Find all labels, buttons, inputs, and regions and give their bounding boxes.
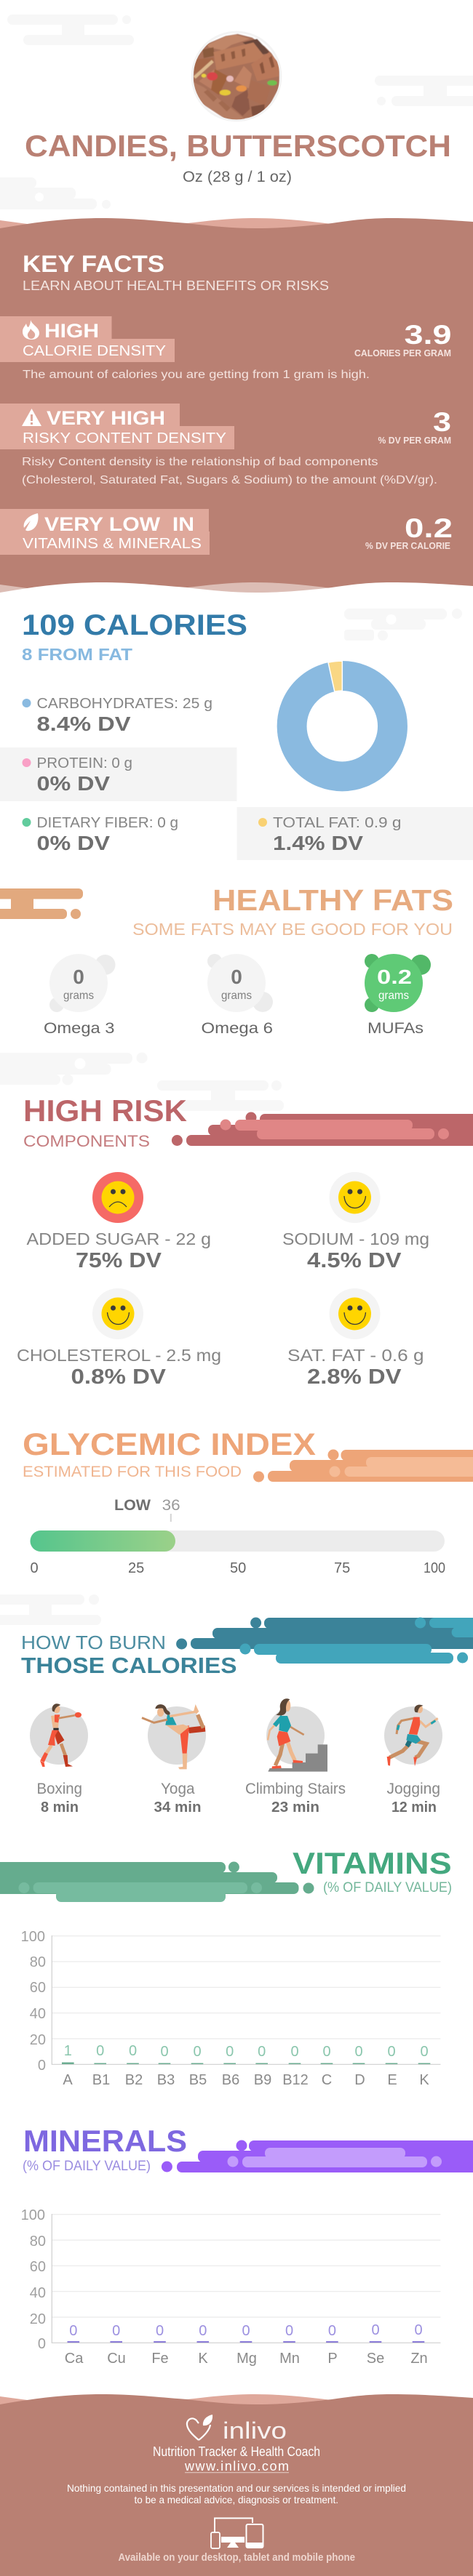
- activity: climbing stairs: 23 min: [271, 1799, 319, 1815]
- vitamins heading: VITAMINS: [293, 1846, 452, 1880]
- legend: carbohydrates: 8.4% DV: [36, 713, 131, 735]
- legend: protein: [22, 755, 132, 795]
- risk: cholesterol: CHOLESTEROL - 2.5 mg: [17, 1346, 221, 1365]
- glycemic subheading: ESTIMATED FOR THIS FOOD: [23, 1464, 242, 1480]
- panel: how to burn those calories: [21, 1617, 473, 1815]
- legend: protein: 0% DV: [36, 772, 110, 795]
- activity: yoga: 34 min: [154, 1799, 201, 1815]
- minerals bar chart: 0: [414, 2322, 423, 2338]
- fact: calorie density: CALORIES PER GRAM: [354, 348, 451, 358]
- minerals subheading: (% OF DAILY VALUE): [23, 2159, 151, 2174]
- vitamins bar chart: 40: [30, 2006, 46, 2022]
- vitamins bar chart: B1: [92, 2072, 110, 2088]
- glycemic gauge: 100: [424, 1560, 445, 1576]
- activity: climbing stairs: Climbing Stairs: [245, 1781, 346, 1797]
- fact: risky content density: RISKY CONTENT DENSITY: [23, 430, 226, 446]
- vitamins bar chart: 0: [354, 2044, 363, 2060]
- glycemic band: [253, 1450, 473, 1482]
- vitamins bar chart: 1: [64, 2043, 72, 2059]
- high risk subheading: COMPONENTS: [23, 1132, 150, 1150]
- minerals bar chart: 0: [371, 2322, 380, 2338]
- fact: calorie density: [0, 316, 451, 381]
- vitamins bar chart: B2: [125, 2072, 143, 2088]
- activity: yoga: Yoga: [161, 1781, 195, 1797]
- minerals bar chart: 0: [69, 2323, 77, 2339]
- brand name: inlivo: [223, 2417, 287, 2444]
- fact: calorie density: The amount of calories you are getting from 1 gram is high.: [23, 369, 370, 381]
- minerals bar chart: 60: [30, 2259, 46, 2275]
- food photo: chocolate candies: [189, 29, 284, 124]
- omega 6 badge: 0: [231, 966, 242, 988]
- panel: high risk components: [17, 1094, 473, 1389]
- vitamins bar chart: A: [63, 2072, 73, 2088]
- vitamins bar chart: 20: [30, 2032, 46, 2048]
- legend: total fat: TOTAL FAT: 0.9 g: [273, 815, 402, 831]
- vitamins bar chart: 0: [387, 2044, 396, 2060]
- risk: added sugar: [26, 1172, 211, 1272]
- risk: sodium: [282, 1172, 429, 1272]
- minerals bar chart: Cu: [107, 2351, 126, 2367]
- minerals bar chart: 0: [156, 2323, 164, 2339]
- glycemic gauge: [31, 1497, 445, 1576]
- mufas badge: MUFAs: [367, 1020, 424, 1037]
- minerals bar chart: Fe: [151, 2351, 169, 2367]
- omega 3 badge: grams: [63, 990, 94, 1002]
- minerals bar chart: 0: [199, 2323, 207, 2339]
- glycemic gauge: 0: [31, 1560, 39, 1576]
- omega 6 badge: [201, 954, 273, 1037]
- icon: leaf: [24, 513, 38, 531]
- glycemic gauge: 50: [230, 1560, 246, 1576]
- glycemic gauge: 25: [128, 1560, 144, 1576]
- disclaimer: Nothing contained in this presentation and our services is intended or implied: [67, 2482, 406, 2494]
- legend: carbohydrates: CARBOHYDRATES: 25 g: [36, 696, 212, 712]
- glycemic gauge: 75: [334, 1560, 350, 1576]
- minerals bar chart: 20: [30, 2311, 46, 2327]
- vitamins bar chart: E: [387, 2072, 397, 2088]
- minerals bar chart: 100: [21, 2207, 45, 2223]
- legend: dietary fiber: [22, 815, 178, 854]
- vitamins bar chart: [21, 1929, 440, 2088]
- vitamins bar chart: 0: [193, 2044, 202, 2060]
- omega 6 badge: grams: [221, 990, 252, 1002]
- vitamins bar chart: B3: [157, 2072, 175, 2088]
- fact: risky content density: VERY HIGH: [47, 407, 165, 429]
- vitamins bar chart: 0: [38, 2058, 46, 2074]
- fact: risky content density: Risky Content density is the relationship of bad components: [22, 456, 378, 468]
- donut chart: [292, 661, 393, 777]
- risk: cholesterol: [17, 1288, 221, 1389]
- burn band: [176, 1617, 473, 1664]
- omega 3 badge: [44, 954, 115, 1037]
- legend: carbohydrates: [22, 696, 212, 735]
- vitamins band: [0, 1861, 314, 1902]
- activity: jogging: Jogging: [387, 1781, 440, 1797]
- healthy fats subheading: SOME FATS MAY BE GOOD FOR YOU: [132, 920, 453, 939]
- glycemic gauge: LOW: [114, 1497, 151, 1514]
- minerals bar chart: P: [327, 2351, 338, 2367]
- minerals band: [162, 2140, 473, 2172]
- fact: risky content density: [0, 404, 451, 486]
- legend: total fat: 1.4% DV: [273, 832, 363, 854]
- fact: vitamins and minerals: [0, 509, 453, 555]
- vitamins bar chart: B6: [222, 2072, 239, 2088]
- minerals bar chart: Ca: [65, 2351, 84, 2367]
- activity: boxing: 8 min: [41, 1799, 79, 1815]
- fact: risky content density: % DV PER GRAM: [378, 435, 451, 446]
- vitamins bar chart: D: [354, 2072, 365, 2088]
- legend: dietary fiber: 0% DV: [36, 832, 110, 854]
- activity: jogging: 12 min: [391, 1799, 437, 1815]
- minerals bar chart: K: [198, 2351, 208, 2367]
- vitamins bar chart: 0: [420, 2044, 429, 2060]
- fact: calorie density: 3.9: [405, 320, 451, 350]
- omega 3 badge: Omega 3: [44, 1020, 115, 1037]
- vitamins bar chart: 0: [322, 2044, 331, 2060]
- legend: total fat: [258, 815, 402, 854]
- minerals bar chart: Mn: [279, 2351, 300, 2367]
- minerals heading: MINERALS: [23, 2124, 187, 2158]
- activity: boxing: Boxing: [36, 1781, 82, 1797]
- calories from fat: 8 FROM FAT: [22, 645, 132, 664]
- omega 6 badge: Omega 6: [201, 1020, 273, 1037]
- calories heading: 109 CALORIES: [22, 609, 247, 641]
- risk: sodium: SODIUM - 109 mg: [282, 1229, 429, 1248]
- panel: healthy fats: [0, 883, 453, 1037]
- minerals bar chart: Mg: [236, 2351, 257, 2367]
- risk: sodium: 4.5% DV: [307, 1249, 402, 1272]
- icon: desktop, tablet and phone: [211, 2519, 263, 2548]
- glycemic gauge: 36: [162, 1497, 180, 1514]
- panel: calories: [0, 609, 473, 860]
- vitamins subheading: (% OF DAILY VALUE): [323, 1880, 452, 1895]
- website link: www.inlivo.com: [184, 2459, 289, 2473]
- vitamins bar chart: 80: [30, 1954, 46, 1970]
- minerals bar chart: 0: [38, 2336, 46, 2352]
- vitamins bar chart: 100: [21, 1929, 45, 1945]
- high risk heading: HIGH RISK: [23, 1094, 187, 1128]
- legend: dietary fiber: DIETARY FIBER: 0 g: [36, 815, 178, 831]
- serving size: Oz (28 g / 1 oz): [183, 169, 292, 185]
- icon: inlivo heart and leaf logo: [187, 2415, 212, 2440]
- minerals bar chart: 0: [328, 2323, 336, 2339]
- fact: vitamins and minerals: % DV PER CALORIE: [365, 540, 450, 551]
- fact: risky content density: 3: [433, 407, 451, 437]
- risk: added sugar: ADDED SUGAR - 22 g: [26, 1229, 211, 1248]
- minerals bar chart: 40: [30, 2285, 46, 2301]
- vitamins bar chart: B12: [282, 2072, 309, 2088]
- minerals bar chart: Se: [367, 2351, 384, 2367]
- fact: vitamins and minerals: VERY LOW IN: [44, 513, 194, 535]
- icon: flame: [23, 320, 39, 340]
- activity: climbing stairs: [245, 1698, 346, 1815]
- key facts subheading: LEARN ABOUT HEALTH BENEFITS OR RISKS: [23, 278, 329, 293]
- panel: vitamins: [0, 1846, 452, 2088]
- vitamins bar chart: B9: [254, 2072, 271, 2088]
- fact: calorie density: HIGH: [44, 320, 99, 342]
- vitamins bar chart: 0: [226, 2044, 234, 2060]
- vitamins bar chart: 0: [96, 2043, 104, 2059]
- mufas badge: [365, 954, 431, 1037]
- panel: footer: [0, 2394, 473, 2576]
- minerals bar chart: [21, 2207, 440, 2367]
- risk: saturated fat: [287, 1288, 424, 1389]
- fact: calorie density: CALORIE DENSITY: [23, 343, 166, 359]
- mufas badge: 0.2: [377, 966, 412, 988]
- title: CANDIES, BUTTERSCOTCH: [25, 129, 451, 163]
- panel: minerals: [21, 2124, 473, 2367]
- risk: saturated fat: 2.8% DV: [307, 1365, 402, 1389]
- vitamins bar chart: 0: [160, 2044, 169, 2060]
- fact: vitamins and minerals: VITAMINS & MINERALS: [23, 536, 202, 552]
- tagline: Nutrition Tracker & Health Coach: [153, 2444, 320, 2459]
- risk: saturated fat: SAT. FAT - 0.6 g: [287, 1346, 424, 1365]
- minerals bar chart: 0: [242, 2323, 250, 2339]
- minerals bar chart: 0: [112, 2323, 120, 2339]
- vitamins bar chart: B5: [189, 2072, 207, 2088]
- glycemic heading: GLYCEMIC INDEX: [23, 1427, 316, 1462]
- vitamins bar chart: 60: [30, 1980, 46, 1996]
- disclaimer: [67, 2482, 406, 2505]
- minerals bar chart: 80: [30, 2234, 46, 2250]
- legend: protein: PROTEIN: 0 g: [36, 755, 132, 771]
- key facts heading: KEY FACTS: [23, 251, 164, 277]
- burn heading line 2: THOSE CALORIES: [21, 1653, 237, 1678]
- fact: vitamins and minerals: 0.2: [405, 513, 453, 543]
- vitamins bar chart: 0: [290, 2044, 299, 2060]
- vitamins bar chart: C: [322, 2072, 332, 2088]
- fact: risky content density: (Cholesterol, Saturated Fat, Sugars & Sodium) to the amount (%DV/gr).: [22, 474, 437, 486]
- high risk band: [172, 1112, 473, 1146]
- vitamins bar chart: 0: [129, 2043, 137, 2059]
- panel: key facts: [0, 218, 473, 607]
- vitamins bar chart: 0: [258, 2044, 266, 2060]
- burn heading line 1: HOW TO BURN: [21, 1632, 166, 1653]
- omega 3 badge: 0: [73, 966, 84, 988]
- minerals bar chart: Zn: [410, 2351, 428, 2367]
- activity: jogging: [384, 1705, 442, 1815]
- icon: warning triangle: [22, 409, 41, 426]
- risk: added sugar: 75% DV: [76, 1249, 162, 1272]
- activity: yoga: [142, 1704, 206, 1815]
- availability note: Available on your desktop, tablet and mobile phone: [118, 2551, 355, 2564]
- activity: boxing: [30, 1704, 88, 1815]
- minerals bar chart: 0: [285, 2323, 293, 2339]
- panel: glycemic index: [23, 1427, 473, 1576]
- healthy fats heading: HEALTHY FATS: [212, 883, 453, 917]
- vitamins bar chart: K: [419, 2072, 429, 2088]
- disclaimer: to be a medical advice, diagnosis or treatment.: [134, 2494, 338, 2505]
- risk: cholesterol: 0.8% DV: [71, 1365, 167, 1389]
- mufas badge: grams: [378, 990, 409, 1002]
